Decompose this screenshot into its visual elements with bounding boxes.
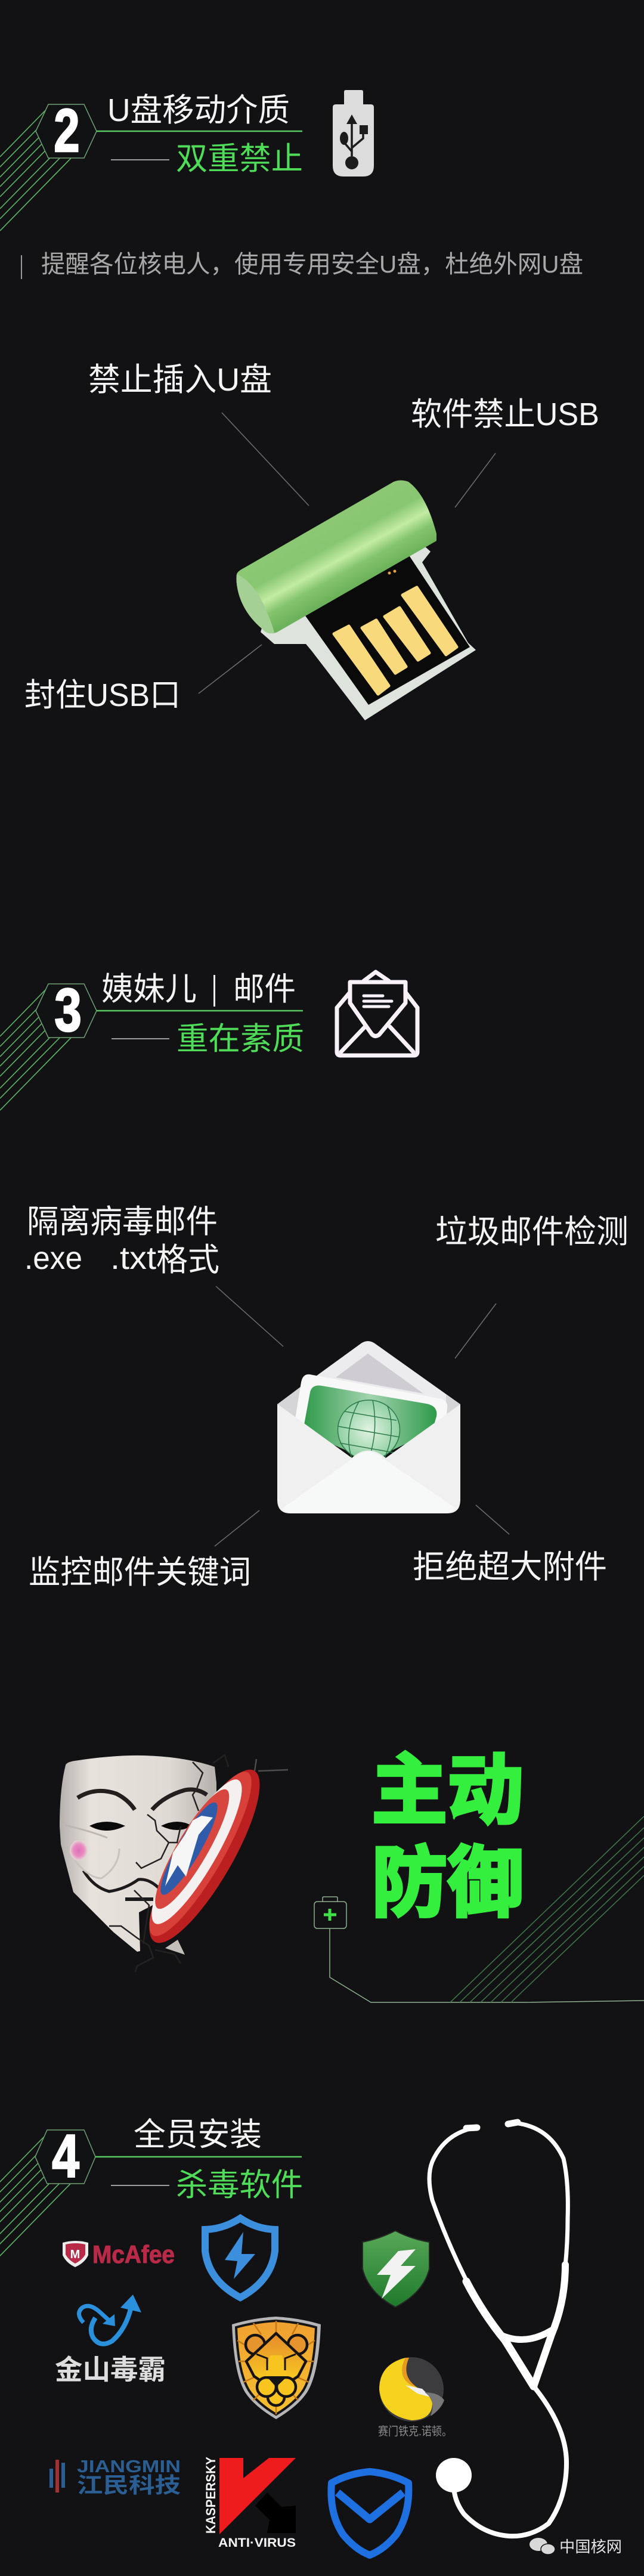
logo: 江民科技 JIANGMIN [49, 2457, 181, 2497]
label: 软件禁止USB: 软件禁止USB [411, 397, 599, 432]
image: white envelope with green globe card [277, 1341, 460, 1513]
number badge 4: 4 [52, 2122, 79, 2190]
label: 隔离病毒邮件 .exe .txt格式: .exe [24, 1240, 82, 1276]
reminder text block: 提醒各位核电人，使用专用安全U盘，杜绝外网U盘 [41, 250, 583, 278]
logo: blue bolt shield [205, 2218, 275, 2298]
logo: Kaspersky: KASPERSKY [203, 2457, 218, 2534]
label: 监控邮件关键词: 监控邮件关键词 [29, 1555, 251, 1590]
logo: 金山毒霸 [55, 2295, 166, 2385]
image: green usb drive [236, 481, 476, 720]
logo: McAfee [63, 2240, 175, 2268]
section 3 header [0, 971, 417, 1110]
logo: McAfee: McAfee [92, 2240, 175, 2268]
logo: green bolt shield [363, 2231, 429, 2307]
title: 姨妹儿 | 邮件: 姨妹儿 [101, 971, 197, 1007]
subtitle: 杀毒软件: 杀毒软件 [176, 2168, 303, 2203]
blurred caption: 赛门铁克.诺顿。 [378, 2425, 452, 2438]
icon: battery with plus [314, 1897, 346, 1928]
image: stethoscope [429, 2122, 568, 2536]
diagonal stripes 4 [0, 2131, 77, 2256]
label: 拒绝超大附件: 拒绝超大附件 [413, 1549, 607, 1585]
section 2 header [0, 90, 374, 231]
subtitle: 重在素质: 重在素质 [177, 1021, 304, 1057]
title: 全员安装: 全员安装 [134, 2117, 262, 2153]
label: 垃圾邮件检测: 垃圾邮件检测 [435, 1214, 628, 1250]
logo: Symantec [378, 2357, 452, 2438]
title: U盘移动介质: U盘移动介质 [107, 92, 290, 128]
logo: 江民科技 JIANGMIN: JIANGMIN [77, 2457, 181, 2476]
logo: blue check shield [331, 2472, 408, 2555]
icon: usb stick [333, 90, 374, 177]
diagonal stripes 2 [0, 105, 78, 231]
diagonal stripes 3 [0, 984, 78, 1110]
logo: lion shield [232, 2317, 321, 2419]
label: 隔离病毒邮件 .exe .txt格式: 格式 [156, 1242, 219, 1278]
logo: 金山毒霸: 金山毒霸 [55, 2354, 166, 2385]
number badge 2: 2 [54, 97, 80, 165]
number badge 3: 3 [54, 976, 82, 1044]
watermark: 中国核网 [530, 2538, 622, 2556]
logo: McAfee: M [70, 2248, 80, 2261]
logo: 江民科技 JIANGMIN: 江民科技 [77, 2473, 181, 2497]
label: 隔离病毒邮件 .exe .txt格式: .txt [110, 1240, 156, 1276]
label: 隔离病毒邮件 .exe .txt格式 [24, 1204, 219, 1278]
title: 姨妹儿 | 邮件: 邮件 [233, 971, 296, 1007]
number badge 4 [35, 2122, 95, 2190]
label: 禁止插入U盘: 禁止插入U盘 [88, 362, 272, 398]
label: 隔离病毒邮件 .exe .txt格式: 隔离病毒邮件 [27, 1204, 218, 1240]
heading: 主动防御 [371, 1747, 524, 1927]
watermark: 中国核网: 中国核网 [559, 2538, 622, 2556]
heading: 主动防御: 主动 [371, 1747, 524, 1834]
image: mask and shield [60, 1755, 288, 1972]
number badge 2 [36, 97, 97, 165]
heading: 主动防御: 防御 [371, 1840, 524, 1927]
label: 封住USB口: 封住USB口 [24, 677, 181, 713]
icon: open envelope [337, 972, 417, 1055]
section 4 header [0, 2117, 303, 2256]
logo: Kaspersky [203, 2457, 296, 2550]
number badge 3 [36, 976, 97, 1044]
subtitle: 双重禁止: 双重禁止 [176, 141, 303, 177]
logo: Kaspersky: ANTI·VIRUS [218, 2536, 296, 2550]
title: 姨妹儿 | 邮件 [101, 971, 296, 1007]
